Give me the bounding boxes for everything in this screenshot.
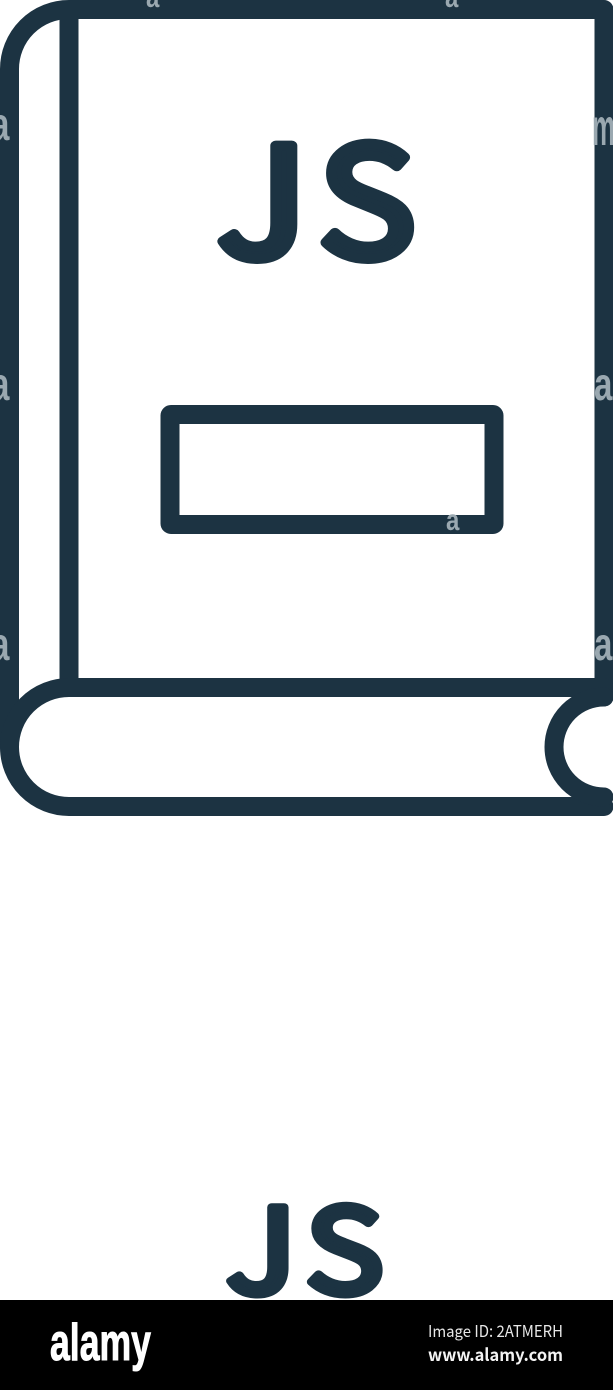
icon: book outline [10, 10, 604, 806]
alamy logo: alamy [50, 1314, 151, 1372]
footer bar [0, 1300, 613, 1390]
cover bottom edge [10, 688, 604, 747]
book cover and spine outline [10, 10, 604, 806]
watermark fragments: a [446, 502, 460, 537]
book cover title JS [217, 80, 416, 301]
book cover title JS: S [318, 80, 416, 301]
caption JS: J [226, 1157, 297, 1327]
caption JS: S [305, 1157, 384, 1327]
website url: www.alamy.com [428, 1341, 563, 1366]
book cover title JS: J [217, 82, 308, 301]
caption JS [226, 1157, 384, 1327]
image id: Image ID: 2ATMERH [428, 1318, 563, 1342]
watermark fragments [0, 0, 613, 670]
book title label box [170, 414, 494, 524]
watermark fragments: a [594, 360, 613, 410]
watermark fragments: a [594, 620, 613, 670]
page block hook [554, 697, 604, 797]
spine divider line [60, 10, 78, 688]
